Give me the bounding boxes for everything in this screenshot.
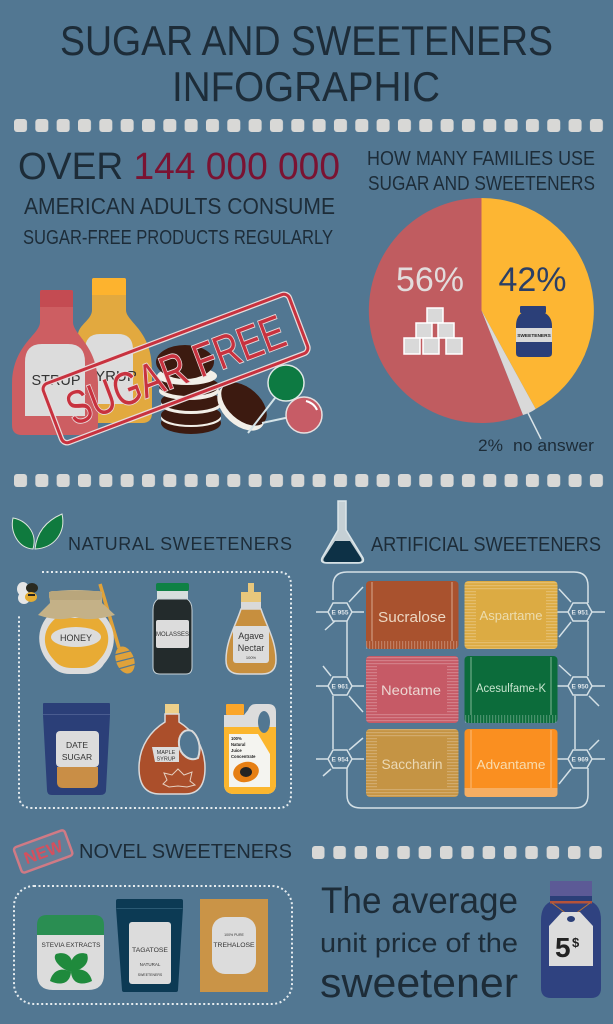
- icon: red syrup bottle: [12, 290, 98, 435]
- heading: novel sweeteners: NOVEL SWEETENERS: [79, 840, 292, 863]
- card: advantame: [464, 729, 558, 797]
- icon: maple syrup jug: [139, 704, 205, 794]
- icon: yellow syrup bottle: [78, 278, 152, 423]
- icon: molasses bottle: MOLASSES: [156, 632, 189, 638]
- icon: sweeteners jar: SWEETENERS: [517, 333, 552, 339]
- label: 2% no answer: [478, 413, 594, 455]
- card: sucralose: Sucralose: [378, 609, 446, 626]
- icon: stevia extracts jar: [37, 915, 104, 990]
- icon: maple syrup jug: SYRUP: [157, 756, 176, 762]
- icon: juice jug: Juice: [231, 748, 242, 753]
- E-number labels: E 969: [572, 756, 589, 764]
- pie chart: [369, 198, 594, 455]
- text: average unit price of the sweetener: unit price of the: [320, 928, 518, 958]
- E-number labels: E 954: [332, 756, 349, 764]
- icon: maple syrup jug: MAPLE: [157, 750, 176, 756]
- icon: tagatose bag: TAGATOSE: [132, 947, 168, 954]
- icon: date sugar bag: [43, 703, 110, 795]
- card: acesulfame-k: [464, 656, 558, 723]
- E-number labels: [332, 610, 589, 764]
- title: INFOGRAPHIC: [172, 63, 440, 110]
- icon: trehalose pack: [200, 899, 268, 992]
- card: sucralose: [366, 581, 458, 649]
- text: average unit price of the sweetener: The average: [321, 880, 518, 921]
- icon: price jar: [541, 881, 601, 998]
- sugar-free products illustration: [12, 278, 322, 444]
- icon: honey jar: HONEY: [60, 633, 92, 643]
- icon: agave nectar bottle: Nectar: [238, 643, 264, 653]
- icon: cookie stack: [156, 345, 221, 434]
- circuit frame: [316, 572, 605, 808]
- panel: natural sweeteners: [12, 514, 292, 808]
- stamp: sugar free: SUGAR FREE: [58, 304, 292, 435]
- icon: tagatose bag: NATURAL: [140, 962, 161, 967]
- label: 2% no answer: 2%: [478, 436, 503, 455]
- icon: honey dipper: [100, 584, 138, 676]
- icon: molasses bottle: [153, 583, 192, 674]
- card: acesulfame-k: Acesulfame-K: [476, 683, 546, 695]
- headline statistic: OVER 144 000 000: [18, 146, 340, 188]
- panel: novel sweeteners: [13, 830, 292, 1004]
- card: saccharin: Saccharin: [382, 756, 442, 772]
- callout: average unit price: [320, 880, 601, 1006]
- icon: stevia extracts jar: STEVIA EXTRACTS: [42, 942, 101, 949]
- headline statistic: AMERICAN ADULTS CONSUME: [24, 193, 335, 219]
- pie heading: [367, 147, 595, 195]
- icon: honey jar: [38, 590, 115, 674]
- icon: juice jug: [224, 704, 276, 794]
- icon: red syrup bottle: STRUP: [32, 372, 80, 389]
- title: SUGAR AND SWEETENERS: [60, 17, 553, 64]
- icon: sweeteners jar: [516, 306, 552, 357]
- icon: juice jug: Natural: [231, 742, 245, 747]
- icon: date sugar bag: DATE: [66, 740, 88, 750]
- title: [60, 17, 553, 110]
- icon: trehalose pack: 100% PURE: [224, 933, 244, 937]
- icon: trehalose pack: TREHALOSE: [213, 942, 255, 949]
- card: neotame: [366, 656, 458, 723]
- E-number labels: E 951: [572, 610, 589, 616]
- icon: flask: [322, 501, 363, 563]
- label: 42%: 42%: [498, 261, 567, 299]
- slice: 56% sugar: [369, 198, 523, 423]
- icon: leaning cookie: [209, 374, 275, 439]
- icon: price jar: $: [572, 935, 580, 950]
- card: neotame: Neotame: [381, 682, 441, 698]
- icon: tagatose bag: [116, 899, 183, 992]
- icon: sugar cubes: [404, 308, 462, 354]
- stamp: sugar free: [41, 293, 310, 444]
- headline statistic: SUGAR-FREE PRODUCTS REGULARLY: [23, 227, 333, 249]
- icon: agave nectar bottle: Agave: [238, 631, 264, 641]
- icon: agave nectar bottle: 100%: [246, 655, 257, 660]
- icon: bee: [17, 582, 38, 604]
- label: 56%: 56%: [396, 261, 464, 299]
- slice: 2% no answer: [482, 310, 536, 415]
- icon: lollipops: [248, 365, 322, 433]
- icon: tagatose bag: SWEETENERS: [138, 973, 163, 977]
- heading: natural sweeteners: NATURAL SWEETENERS: [68, 534, 292, 554]
- icon: juice jug: Concentrate: [231, 754, 256, 759]
- icon: juice jug: 100%: [231, 736, 242, 741]
- icon: price jar: 5: [555, 932, 571, 963]
- card: advantame: Advantame: [476, 757, 546, 772]
- panel: artificial sweeteners: [316, 501, 605, 808]
- label: 2% no answer: no answer: [513, 436, 594, 455]
- E-number labels: E 955: [332, 610, 349, 616]
- icon: date sugar bag: SUGAR: [62, 752, 92, 762]
- icon: leaves: [12, 514, 63, 549]
- icon: agave nectar bottle: [226, 583, 276, 674]
- slice: 42% sweeteners: [482, 198, 594, 409]
- E-number labels: E 950: [572, 684, 589, 690]
- E-number labels: E 961: [332, 684, 349, 690]
- stamp: new: [13, 830, 73, 873]
- text: average unit price of the sweetener: sweetener: [320, 959, 518, 1006]
- headline statistic: [18, 146, 340, 249]
- stamp: new: NEW: [21, 836, 66, 868]
- text: average unit price of the sweetener: [320, 880, 518, 1006]
- card: saccharin: [366, 729, 458, 797]
- icon: yellow syrup bottle: YRUP: [95, 368, 137, 385]
- card: aspartame: [464, 581, 558, 649]
- card: aspartame: Aspartame: [480, 609, 543, 623]
